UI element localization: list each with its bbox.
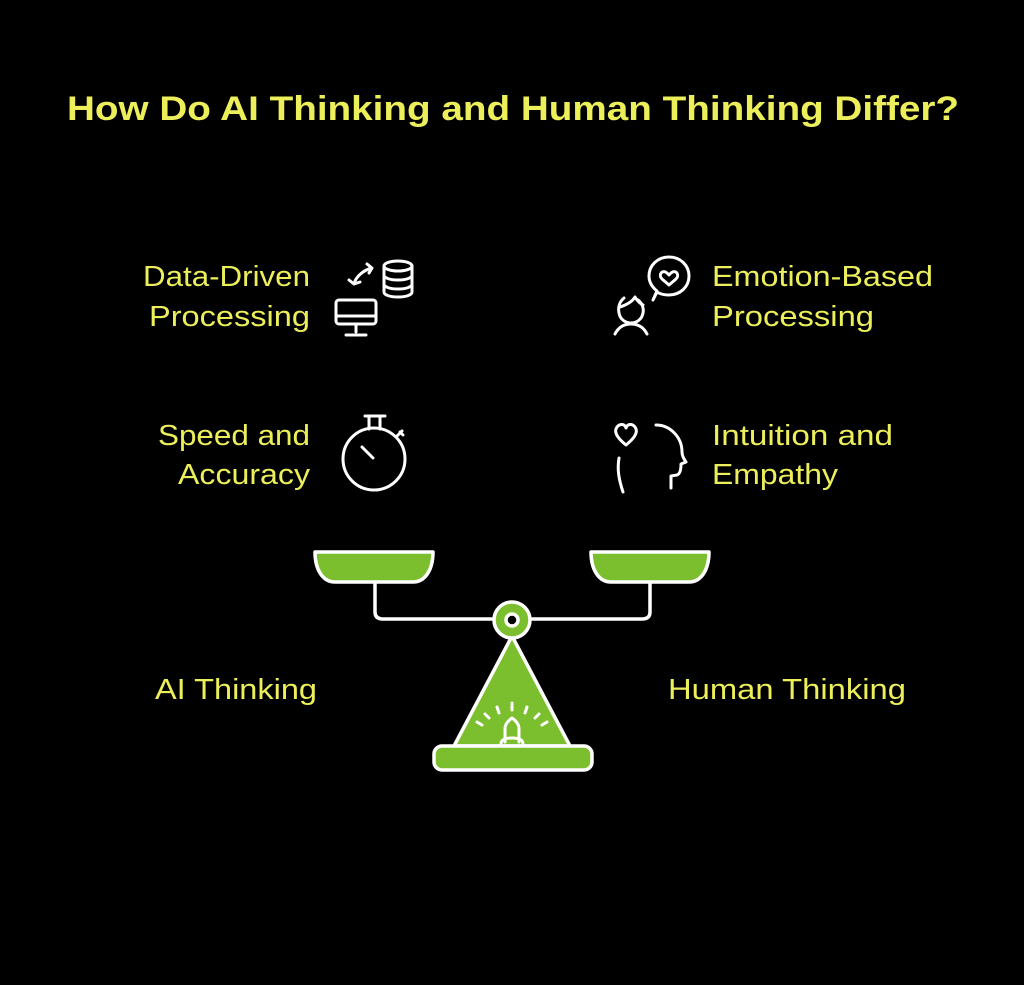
icon: computer and database	[336, 261, 412, 335]
lamp icon	[477, 703, 547, 744]
text: Emotion-Based Processing: Processing	[712, 301, 874, 333]
text: Intuition and Empathy: Empathy	[712, 459, 839, 491]
text: Intuition and Empathy	[712, 420, 893, 491]
base triangle	[454, 636, 570, 746]
icon: person with heart speech bubble	[615, 257, 689, 334]
text: Speed and Accuracy: Speed and	[158, 420, 310, 452]
title: How Do AI Thinking and Human Thinking Differ?	[67, 90, 959, 128]
icon: head with heart	[616, 424, 686, 492]
text: Data-Driven Processing: Processing	[149, 301, 310, 333]
base plate	[434, 746, 592, 770]
icon: stopwatch	[343, 416, 405, 490]
scale	[315, 552, 709, 770]
text: Speed and Accuracy	[158, 420, 311, 491]
text: Emotion-Based Processing	[712, 261, 933, 333]
text: Data-Driven Processing	[143, 261, 310, 333]
text: Human Thinking: Human Thinking	[668, 674, 906, 706]
text: Intuition and Empathy: Intuition and	[712, 420, 893, 452]
beam	[375, 582, 650, 619]
text: Speed and Accuracy: Accuracy	[178, 459, 311, 491]
text: Emotion-Based Processing: Emotion-Based	[712, 261, 933, 293]
left pan	[315, 552, 433, 582]
pivot	[494, 602, 530, 638]
right pan	[591, 552, 709, 582]
text: Data-Driven Processing: Data-Driven	[143, 261, 310, 293]
text: AI Thinking: AI Thinking	[155, 674, 317, 706]
